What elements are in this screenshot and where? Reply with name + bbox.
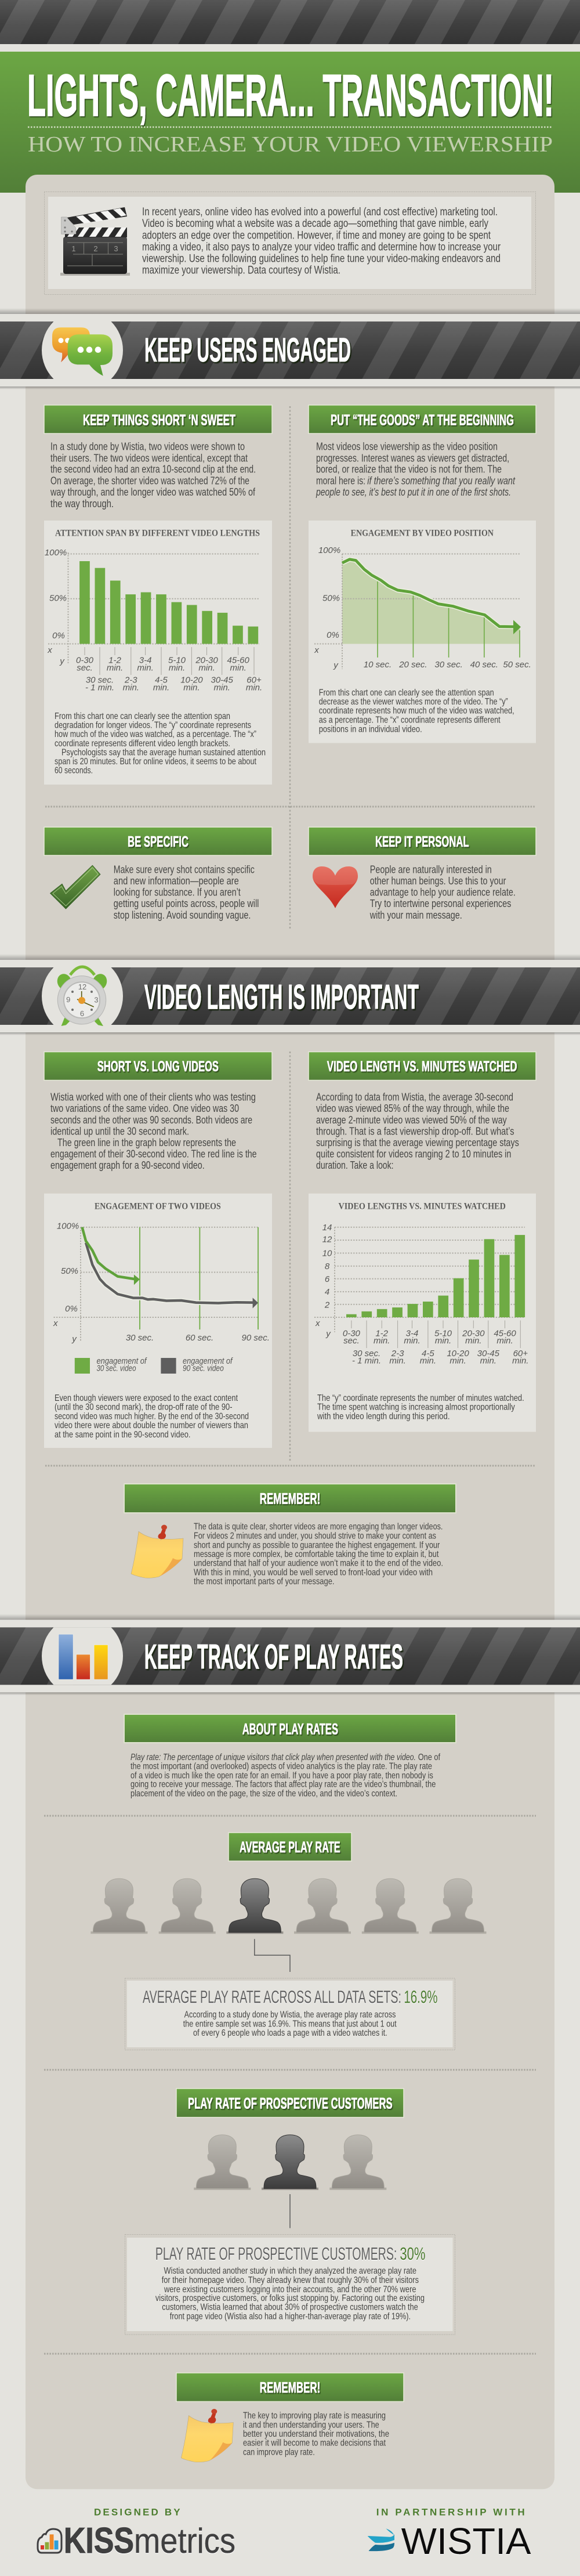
chart note <box>55 711 266 776</box>
text block: understand that half of your audience won’t make it to the end of the video. <box>194 1558 443 1568</box>
text block: the most important parts of your message. <box>194 1577 334 1587</box>
text block: the second video had an extra 10-second clip at the end. <box>50 463 256 475</box>
chart note: degradation for longer videos. The “y” coordinate represents <box>55 721 251 730</box>
callout: prospective play rate: PLAY RATE OF PROSPECTIVE CUSTOMERS: <box>155 2243 397 2264</box>
text block: Wistia worked with one of their clients who was testing <box>50 1091 256 1103</box>
bar chart: minutes watched: min. <box>465 1336 481 1346</box>
callout: average play rate: AVERAGE PLAY RATE ACROSS ALL DATA SETS: <box>143 1987 401 2007</box>
intro text: Video is becoming what a website was a decade ago—something that gave nimble, early <box>142 217 488 230</box>
text block: stop listening. Avoid sounding vague. <box>114 909 251 921</box>
chart note: The time spent watching is increasing almost proportionally <box>317 1402 515 1412</box>
chart note: with the video length during this period. <box>317 1411 450 1422</box>
text block: of a video is much like the open rate for an email. If you have a poor play rate, then nobody is <box>130 1771 433 1780</box>
footer: designed by <box>38 2507 235 2561</box>
bar chart: minutes watched: 10 <box>322 1249 332 1258</box>
heading: PLAY RATE OF PROSPECTIVE CUSTOMERS <box>188 2095 393 2112</box>
bar chart: minutes watched: 12 <box>322 1235 332 1244</box>
text block: average 2-minute video was viewed 50% of the way <box>316 1114 507 1126</box>
heading <box>124 1714 456 1743</box>
bar chart: minutes watched: 2-3 <box>391 1349 404 1359</box>
bar chart: attention span: 20-30 <box>195 656 218 665</box>
panel: put the goods at the beginning <box>309 405 536 743</box>
text block: On average, the shorter video was watched 72% of the <box>50 475 249 487</box>
icon: alarm clock <box>55 967 109 1025</box>
heading <box>309 827 536 855</box>
bar chart: attention span: min. <box>123 682 139 693</box>
bar chart: minutes watched: 6 <box>325 1274 330 1284</box>
chart note: as a percentage. The “x” coordinate represents different <box>319 716 501 725</box>
chart note: The “y” coordinate represents the number of minutes watched. <box>317 1393 524 1403</box>
bar chart: attention span: 5-10 <box>168 656 186 665</box>
icon: clapperboard: 2 <box>93 244 98 253</box>
bar chart: attention span <box>44 521 272 785</box>
logo: KISSmetrics <box>38 2521 235 2561</box>
text block: other human beings. Use this to your <box>370 875 506 887</box>
bar chart: attention span: 3-4 <box>139 656 151 665</box>
heading <box>44 827 272 855</box>
bar chart: attention span: 45-60 <box>227 656 250 665</box>
bar chart: minutes watched: 1-2 <box>375 1329 389 1339</box>
text block: With this in mind, you would be well served to front-load your video with <box>194 1567 433 1577</box>
bar chart: minutes watched: 8 <box>325 1262 330 1271</box>
line chart: engagement of two videos: 50% <box>61 1266 78 1276</box>
panel: video length vs minutes watched <box>309 1052 536 1432</box>
icon: three people, one highlighted <box>194 2135 386 2190</box>
title banner <box>0 52 580 193</box>
bar chart: minutes watched: min. <box>435 1336 451 1346</box>
bar chart: minutes watched: min. <box>496 1336 513 1346</box>
bar chart: attention span: 2-3 <box>124 675 137 685</box>
intro text <box>142 205 501 276</box>
area chart: engagement by position: y <box>333 660 339 670</box>
text block: Make sure every shot contains specific <box>114 863 255 875</box>
line chart: engagement of two videos: x <box>53 1318 58 1328</box>
area chart: engagement by position: 30 sec. <box>434 660 463 670</box>
logo: Wistia: WISTIA <box>401 2520 531 2562</box>
callout: prospective play rate: 30% <box>400 2243 425 2264</box>
text block: through. That is a fast viewership drop-off. But what’s <box>316 1125 514 1137</box>
intro text: maximize your viewership. Data courtesy of Wistia. <box>142 263 340 276</box>
heading: KEEP USERS ENGAGED <box>144 331 351 369</box>
bar chart: minutes watched: 3-4 <box>406 1329 418 1339</box>
chart note: coordinate represents how much of the video was watched, <box>319 706 514 716</box>
text block: engagement graph for a 90-second video. <box>50 1159 205 1171</box>
heading <box>176 2089 404 2118</box>
icon: clapperboard <box>60 207 130 276</box>
bar chart: attention span: min. <box>153 682 169 693</box>
bar chart: minutes watched: 20-30 <box>462 1329 485 1339</box>
text block: short and punchy as possible to guarantee the highest engagement. If your <box>194 1540 440 1550</box>
text block: quite consistent for videos ranging 2 to 10 minutes in <box>316 1148 511 1160</box>
bar chart: attention span: 50% <box>49 593 67 604</box>
bar chart: minutes watched: 5-10 <box>434 1329 452 1339</box>
area chart: engagement by position: 50% <box>322 593 340 604</box>
bar chart: minutes watched <box>309 1194 536 1432</box>
line chart: engagement of two videos: ENGAGEMENT OF TWO VIDEOS <box>95 1202 221 1212</box>
chart note: at the same point in the 90-second video. <box>55 1430 190 1440</box>
icon: clapperboard: 3 <box>114 244 118 253</box>
heading: SHORT VS. LONG VIDEOS <box>97 1058 219 1075</box>
text block: Try to intertwine personal experiences <box>370 897 511 909</box>
icon: alarm clock: 12 <box>78 982 86 991</box>
area chart: engagement by position: 40 sec. <box>470 660 498 670</box>
heading: ABOUT PLAY RATES <box>242 1720 338 1737</box>
bar chart: attention span: x <box>47 645 52 655</box>
logo: KISSmetrics: metrics <box>134 2521 235 2560</box>
footer: in partnership with: IN PARTNERSHIP WITH <box>376 2507 525 2517</box>
bar chart: attention span: 1-2 <box>108 656 121 665</box>
text block <box>194 1522 443 1587</box>
icon: alarm clock: 3 <box>94 996 99 1004</box>
panel: average play rate <box>90 1833 486 2050</box>
chart note <box>317 1393 524 1422</box>
bar chart: attention span: 0% <box>52 631 65 641</box>
panel: prospective customers <box>125 2089 455 2335</box>
footer: in partnership with <box>368 2507 531 2562</box>
bar chart: minutes watched: min. <box>512 1356 528 1366</box>
text block: and new information—people are <box>114 875 239 887</box>
chart note: video there were about double the number of viewers than <box>55 1421 248 1430</box>
line chart: engagement of two videos: 30 sec. <box>126 1333 154 1343</box>
bar chart: minutes watched: 14 <box>322 1223 332 1233</box>
text block: moral here is: <box>316 475 365 487</box>
bar chart: attention span: 30 sec. <box>86 675 114 685</box>
text block: The data is quite clear, shorter videos are more engaging than longer videos. <box>194 1522 443 1532</box>
callout: prospective play rate: were existing customers logging into their accounts, and the other 70% were <box>164 2285 416 2295</box>
callout: average play rate <box>125 1978 455 2050</box>
callout: prospective play rate <box>125 2234 455 2335</box>
bar chart: attention span: 10-20 <box>180 675 203 685</box>
callout: average play rate: the entire sample set was 16.9%. This means that just about 1 out <box>183 2019 397 2029</box>
text block: According to data from Wistia, the average 30-second <box>316 1091 513 1103</box>
line chart: engagement of two videos <box>44 1194 272 1448</box>
bar chart: minutes watched: min. <box>374 1336 390 1346</box>
text block: engagement of their 30-second video. The red line is the <box>50 1148 257 1160</box>
chart note: second video was much higher. By the end of the 30-second <box>55 1411 249 1422</box>
panel: short vs long <box>44 1052 272 1448</box>
bar chart: attention span: sec. <box>77 663 93 673</box>
text block: the way through. <box>50 497 114 510</box>
section band: keep users engaged <box>0 308 580 389</box>
bar chart: attention span: min. <box>246 682 262 693</box>
bar chart: attention span: min. <box>169 663 185 673</box>
bar chart: minutes watched: sec. <box>343 1336 360 1346</box>
legend: engagement of <box>96 1356 147 1366</box>
text block: One of <box>418 1753 440 1762</box>
line chart: engagement of two videos: 100% <box>57 1221 79 1231</box>
bar chart: attention span: 30-45 <box>211 675 234 685</box>
bar chart: minutes watched: min. <box>480 1356 496 1366</box>
chart note: From this chart one can clearly see the attention span <box>55 711 230 721</box>
panel: about play rates <box>124 1714 456 1799</box>
bar chart: minutes watched: 4 <box>325 1287 329 1297</box>
bar chart: attention span: 4-5 <box>155 675 168 685</box>
line chart: engagement of two videos: 0% <box>65 1304 78 1314</box>
top striped band <box>0 0 580 44</box>
text block: with your main message. <box>369 909 462 921</box>
icon: alarm clock: 9 <box>66 995 70 1004</box>
area chart: engagement by position: 20 sec. <box>398 660 427 670</box>
text block: The key to improving play rate is measuring <box>243 2411 386 2421</box>
panel: be specific <box>44 827 272 921</box>
text block: seconds and the other was 90 seconds. Both videos are <box>50 1114 252 1126</box>
footer: designed by: DESIGNED BY <box>94 2507 180 2517</box>
connector <box>289 2194 291 2228</box>
heading: REMEMBER! <box>260 1490 320 1508</box>
bar chart: minutes watched: 60+ <box>513 1349 528 1359</box>
heading <box>309 1052 536 1081</box>
heading: REMEMBER! <box>260 2379 320 2396</box>
callout: prospective play rate: for their homepage video. They already knew that roughly 30% of their visitors <box>162 2275 419 2285</box>
text block: bored, or realize that the video is not for them. The <box>316 463 502 475</box>
text block: it and then understanding your users. The <box>243 2420 379 2430</box>
area chart: engagement by position: x <box>314 645 319 655</box>
bar chart: minutes watched: 30-45 <box>477 1349 500 1359</box>
text block: placement of the video on the page, the size of the video, and the video’s context. <box>130 1789 397 1799</box>
chart note: From this chart one can clearly see the attention span <box>319 688 494 698</box>
area chart: engagement by position: 0% <box>327 630 339 640</box>
chart note: how much of the video was watched, as a percentage. The “x” <box>55 729 256 739</box>
chart note: Psychologists say that the average human sustained attention <box>61 747 266 758</box>
bar chart: attention span: min. <box>137 663 154 673</box>
chart note: positions in an individual video. <box>319 724 422 734</box>
heading: KEEP THINGS SHORT ‘N SWEET <box>83 412 235 428</box>
text block <box>130 1753 440 1799</box>
bar chart: attention span: min. <box>183 682 200 693</box>
chart note: 60 seconds. <box>55 766 93 776</box>
bar chart: attention span: min. <box>230 663 246 673</box>
logo: KISSmetrics: KISS <box>64 2521 134 2561</box>
bar chart: minutes watched: 30 sec. <box>353 1349 380 1359</box>
icon: sticky note <box>181 2409 233 2462</box>
text block: can improve play rate. <box>243 2448 315 2458</box>
legend: engagement of <box>183 1356 233 1366</box>
callout: average play rate: According to a study done by Wistia, the average play rate across <box>184 2010 396 2019</box>
callout: prospective play rate: Wistia conducted another study in which they analyzed the average play rate <box>164 2266 416 2276</box>
text block: getting useful points across, people will <box>114 897 259 909</box>
text block: video was viewed 85% of the way through, while the <box>316 1102 509 1114</box>
bar chart: minutes watched: 10-20 <box>447 1349 469 1359</box>
text block: message is more complex, be comfortable taking the time to explain it, but <box>194 1549 439 1559</box>
bar chart: attention span: 60+ <box>246 675 262 685</box>
heading <box>44 1052 272 1081</box>
column divider <box>289 1052 291 1462</box>
connector <box>255 1939 290 1972</box>
bar chart: minutes watched: 4-5 <box>422 1349 434 1359</box>
bar chart: attention span: min. <box>198 663 215 673</box>
bar chart: attention span: min. <box>214 682 230 693</box>
chart note: span is 20 minutes. But for online videos, it seems to be about <box>55 757 256 767</box>
text block: Most videos lose viewership as the video position <box>316 440 498 453</box>
text block <box>243 2411 389 2458</box>
text block: duration. Take a look: <box>316 1159 394 1171</box>
text block <box>369 863 516 921</box>
chart note <box>319 688 514 734</box>
callout: average play rate: 16.9% <box>404 1987 437 2007</box>
heading <box>124 1484 456 1513</box>
text block: advantage to help your audience relate. <box>370 886 516 898</box>
text block: two variations of the same video. One video was 30 <box>50 1102 239 1114</box>
text block: going to receive your message. The factors that affect play rate are the video’s thumbnail, the <box>130 1780 436 1790</box>
text block: Play rate: The percentage of unique visitors that click play when presented with the video. <box>130 1753 416 1762</box>
icon: chat bubbles <box>52 327 113 376</box>
legend: 30 sec. video <box>96 1364 136 1373</box>
bar chart: minutes watched: 2 <box>324 1300 330 1310</box>
icon: clapperboard: 1 <box>71 244 76 253</box>
bar chart: attention span: ATTENTION SPAN BY DIFFERENT VIDEO LENGTHS <box>55 528 260 539</box>
bar chart: attention span: - 1 min. <box>85 682 114 693</box>
text block: the most important (and overlooked) aspects of video analytics is the play rate. The play rate <box>130 1762 432 1772</box>
chart note <box>55 1393 249 1440</box>
bar chart: attention span: y <box>59 656 65 666</box>
callout: prospective play rate: visitors, prospective customers, or folks just stopping by. Factoring out the existing <box>155 2293 425 2303</box>
area chart: engagement by position: 50 sec. <box>503 660 531 670</box>
legend <box>75 1356 233 1374</box>
text block: People are naturally interested in <box>370 863 492 875</box>
text block <box>114 863 259 921</box>
intro box <box>44 192 536 295</box>
icon: six people, one highlighted <box>90 1878 486 1934</box>
chart note: (until the 30 second mark), the drop-off rate of the 90- <box>55 1402 232 1412</box>
line chart: engagement of two videos: y <box>71 1334 77 1344</box>
callout: prospective play rate: front page video (Wistia also had a higher-than-average play rate of 19%). <box>170 2311 411 2321</box>
heading <box>176 2373 404 2401</box>
chart note: decrease as the viewer watches more of the video. The “y” <box>319 697 508 707</box>
bar chart: minutes watched: - 1 min. <box>352 1356 381 1366</box>
icon: alarm clock: 6 <box>80 1009 84 1018</box>
panel: remember (play rates) <box>176 2373 404 2462</box>
column divider <box>289 406 291 928</box>
line chart: engagement of two videos: 90 sec. <box>242 1333 270 1343</box>
icon: bar graph <box>59 1634 108 1679</box>
text block: their users. The two videos were identical, except that <box>50 451 248 464</box>
icon: heart <box>313 866 358 908</box>
heading <box>309 405 536 433</box>
panel: keep things short <box>44 405 272 785</box>
callout: prospective play rate: customers, Wistia learned that about 30% of prospective customers watch the <box>162 2303 418 2312</box>
chart note: Even though viewers were exposed to the exact content <box>55 1393 238 1403</box>
bar chart: attention span: 100% <box>45 548 67 558</box>
line chart: engagement of two videos: 60 sec. <box>186 1333 213 1343</box>
area chart: engagement by position: 100% <box>318 545 340 555</box>
area chart: engagement by position: ENGAGEMENT BY VIDEO POSITION <box>351 528 494 539</box>
bar chart: minutes watched: min. <box>449 1356 466 1366</box>
text block: identical up until the 30 second mark. <box>50 1125 189 1137</box>
bar chart: minutes watched: min. <box>420 1356 436 1366</box>
text block: The green line in the graph below represents the <box>57 1136 236 1148</box>
area chart: engagement by position <box>309 521 536 743</box>
text block: if there’s something that you really want <box>367 475 516 487</box>
panel: keep it personal <box>309 827 536 921</box>
bar chart: minutes watched: 45-60 <box>494 1329 516 1339</box>
area chart: engagement by position: 10 sec. <box>364 660 392 670</box>
callout: average play rate: of every 6 people who loads a page with a video watches it. <box>193 2028 387 2038</box>
heading <box>229 1833 351 1861</box>
text block: better you understand their motivations, the <box>243 2429 389 2439</box>
text block <box>50 440 256 510</box>
text block <box>50 1091 257 1171</box>
text block <box>316 440 516 498</box>
panel: remember (video length) <box>124 1484 456 1587</box>
text block: surprising is that the average viewing percentage stays <box>316 1136 519 1148</box>
bar chart: attention span: min. <box>107 663 123 673</box>
section band: play rates <box>0 1614 580 1695</box>
heading: KEEP IT PERSONAL <box>375 833 469 850</box>
legend: 90 sec. video <box>183 1364 224 1373</box>
icon: check mark <box>50 865 100 909</box>
text block <box>316 1091 519 1171</box>
text block: looking for substance. If you aren’t <box>114 886 241 898</box>
icon: sticky note <box>131 1525 183 1578</box>
bar chart: minutes watched: y <box>325 1329 331 1339</box>
bar chart: minutes watched: min. <box>389 1356 406 1366</box>
heading: AVERAGE PLAY RATE <box>240 1838 340 1856</box>
bar chart: minutes watched: min. <box>404 1336 420 1346</box>
text block: In a study done by Wistia, two videos were shown to <box>50 440 245 453</box>
intro text: adopters an edge over the competition. However, if time and money are going to be spent <box>142 229 491 241</box>
subtitle: HOW TO INCREASE YOUR VIDEO VIEWERSHIP <box>28 132 553 157</box>
text block: easier it will become to make decisions that <box>243 2438 386 2448</box>
text block: For videos 2 minutes and under, you should strive to make your content as <box>194 1531 436 1541</box>
bar chart: minutes watched: 0-30 <box>343 1329 361 1339</box>
bar chart: attention span: 0-30 <box>76 656 94 665</box>
text block: progresses. Interest wanes as viewers get distracted, <box>316 451 509 464</box>
section band: video length <box>0 954 580 1035</box>
heading: BE SPECIFIC <box>128 833 188 850</box>
bar chart: minutes watched: VIDEO LENGTHS VS. MINUTES WATCHED <box>339 1202 506 1212</box>
heading <box>44 405 272 433</box>
bar chart: minutes watched: x <box>315 1318 320 1328</box>
text block: way through, and the longer video was watched 50% of <box>50 486 256 498</box>
text block: people to see, it’s best to put it in one of the first shots. <box>316 486 511 498</box>
chart note: coordinate represents different video length brackets. <box>55 739 230 749</box>
